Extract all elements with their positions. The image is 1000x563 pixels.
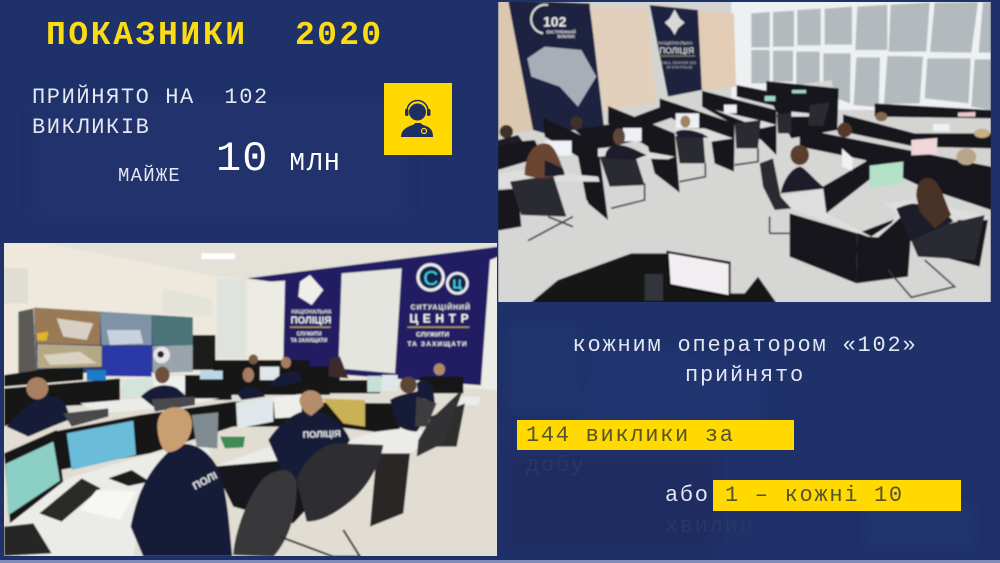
callout: 144 calls per day bbox=[517, 420, 794, 478]
photo: situation centre: ПОЛІ bbox=[191, 470, 220, 493]
photo: 102 call centre: ЕКСТРЕННИЙ bbox=[546, 29, 576, 34]
photo: 102 call centre: НАЦІОНАЛЬНА bbox=[659, 41, 694, 46]
title bbox=[46, 17, 417, 465]
photo: situation centre: СЛУЖИТИ bbox=[416, 332, 449, 339]
callout: 144 calls per day: 144 виклики за bbox=[526, 423, 735, 448]
photo: situation centre: ТА ЗАХИЩАТИ bbox=[291, 338, 328, 344]
photo: situation centre: СИТУАЦІЙНИЙ bbox=[411, 302, 470, 311]
photo: situation centre: ТА ЗАХИЩАТИ bbox=[407, 341, 467, 348]
icon: operator with headset bbox=[384, 83, 452, 155]
photo: situation centre: НАЦІОНАЛЬНА bbox=[291, 309, 332, 315]
callout: one every 10 minutes: або bbox=[665, 483, 710, 508]
callout: 144 calls per day: добу bbox=[526, 453, 586, 478]
stat: 10 million: 10 МЛН bbox=[216, 135, 341, 183]
text: calls received label: ПРИЙНЯТО НА 102 ВИКЛИКІВ bbox=[32, 85, 269, 140]
text: almost: МАЙЖЕ bbox=[118, 165, 181, 187]
title: ПОКАЗНИКИ bbox=[46, 17, 248, 54]
photo: situation centre: ПОЛІЦІЯ bbox=[302, 429, 341, 440]
photo: situation centre: ПОЛІЦІЯ bbox=[291, 315, 331, 326]
photo: situation centre: С bbox=[423, 267, 438, 290]
callout: one every 10 minutes: 1 – кожні 10 bbox=[725, 483, 904, 508]
callout: one every 10 minutes: хвилин bbox=[665, 514, 754, 539]
title: 2020 bbox=[295, 17, 383, 54]
photo: 102 call centre: OF KYIV POLICE bbox=[666, 65, 693, 69]
photo: situation centre bbox=[4, 243, 497, 556]
photo: 102 call centre: CALL CENTER 102 bbox=[661, 60, 697, 65]
text: per operator heading: кожним оператором «102» прийнято bbox=[572, 333, 918, 388]
photo: 102 call centre: ПОЛІЦІЯ bbox=[659, 45, 694, 55]
photo: situation centre: СЛУЖИТИ bbox=[297, 331, 322, 337]
photo: situation centre: Ц bbox=[453, 277, 463, 291]
photo: situation centre: ЦЕНТР bbox=[409, 312, 469, 326]
photo: 102 call centre bbox=[498, 2, 991, 302]
photo: 102 call centre: ВИКЛИК bbox=[557, 34, 575, 39]
photo: 102 call centre: 102 bbox=[543, 14, 567, 30]
callout: one every 10 minutes bbox=[665, 480, 961, 539]
